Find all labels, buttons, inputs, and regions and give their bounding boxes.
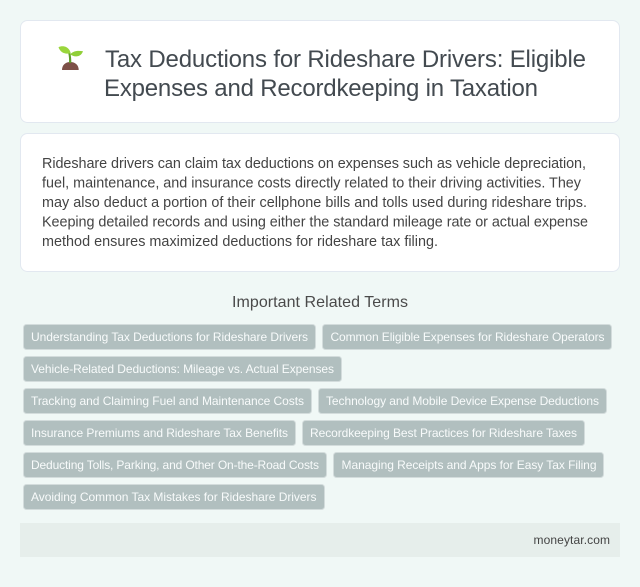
tag: Insurance Premiums and Rideshare Tax Benefits <box>31 426 288 440</box>
title text: Tax Deductions for Rideshare Drivers: Eligible <box>105 46 586 73</box>
tag: Understanding Tax Deductions for Rideshare Drivers <box>31 330 308 344</box>
tag: Tracking and Claiming Fuel and Maintenance Costs <box>31 394 304 408</box>
summary paragraph: fuel, maintenance, and insurance costs directly related to their driving activities. They <box>42 176 582 192</box>
tag: Common Eligible Expenses for Rideshare Operators <box>330 330 604 344</box>
summary paragraph: Keeping detailed records and using either the standard mileage rate or actual expense <box>42 214 588 230</box>
tag <box>24 484 324 510</box>
tag <box>24 420 296 446</box>
tag <box>24 388 312 414</box>
tag <box>322 324 612 350</box>
tag: Managing Receipts and Apps for Easy Tax Filing <box>342 458 596 472</box>
panel: title card <box>20 20 620 122</box>
icon: sprout <box>58 46 83 70</box>
tag: Technology and Mobile Device Expense Deductions <box>326 394 599 408</box>
footer source text: moneytar.com <box>534 533 610 547</box>
tag: Vehicle-Related Deductions: Mileage vs. Actual Expenses <box>31 362 334 376</box>
tag <box>302 420 584 446</box>
tag <box>318 388 606 414</box>
tag <box>24 452 326 478</box>
tag: Avoiding Common Tax Mistakes for Rideshare Drivers <box>31 490 316 504</box>
title text <box>104 46 586 102</box>
summary paragraph: may also deduct a portion of their cellphone bills and tolls used during rideshare trips. <box>42 195 587 211</box>
tag: Recordkeeping Best Practices for Rideshare Taxes <box>310 426 577 440</box>
summary paragraph <box>42 156 588 250</box>
footer bar <box>20 523 620 557</box>
summary paragraph: Rideshare drivers can claim tax deductions on expenses such as vehicle depreciation, <box>42 156 586 172</box>
tag list: related terms <box>24 324 612 510</box>
panel: summary card <box>20 134 620 272</box>
tag <box>24 324 316 350</box>
tag <box>24 356 342 382</box>
title text: Expenses and Recordkeeping in Taxation <box>104 75 538 102</box>
summary paragraph: method ensures maximized deductions for rideshare tax filing. <box>42 234 438 250</box>
heading: related terms: Important Related Terms <box>232 294 408 311</box>
tag: Deducting Tolls, Parking, and Other On-the-Road Costs <box>31 458 319 472</box>
tag <box>334 452 604 478</box>
